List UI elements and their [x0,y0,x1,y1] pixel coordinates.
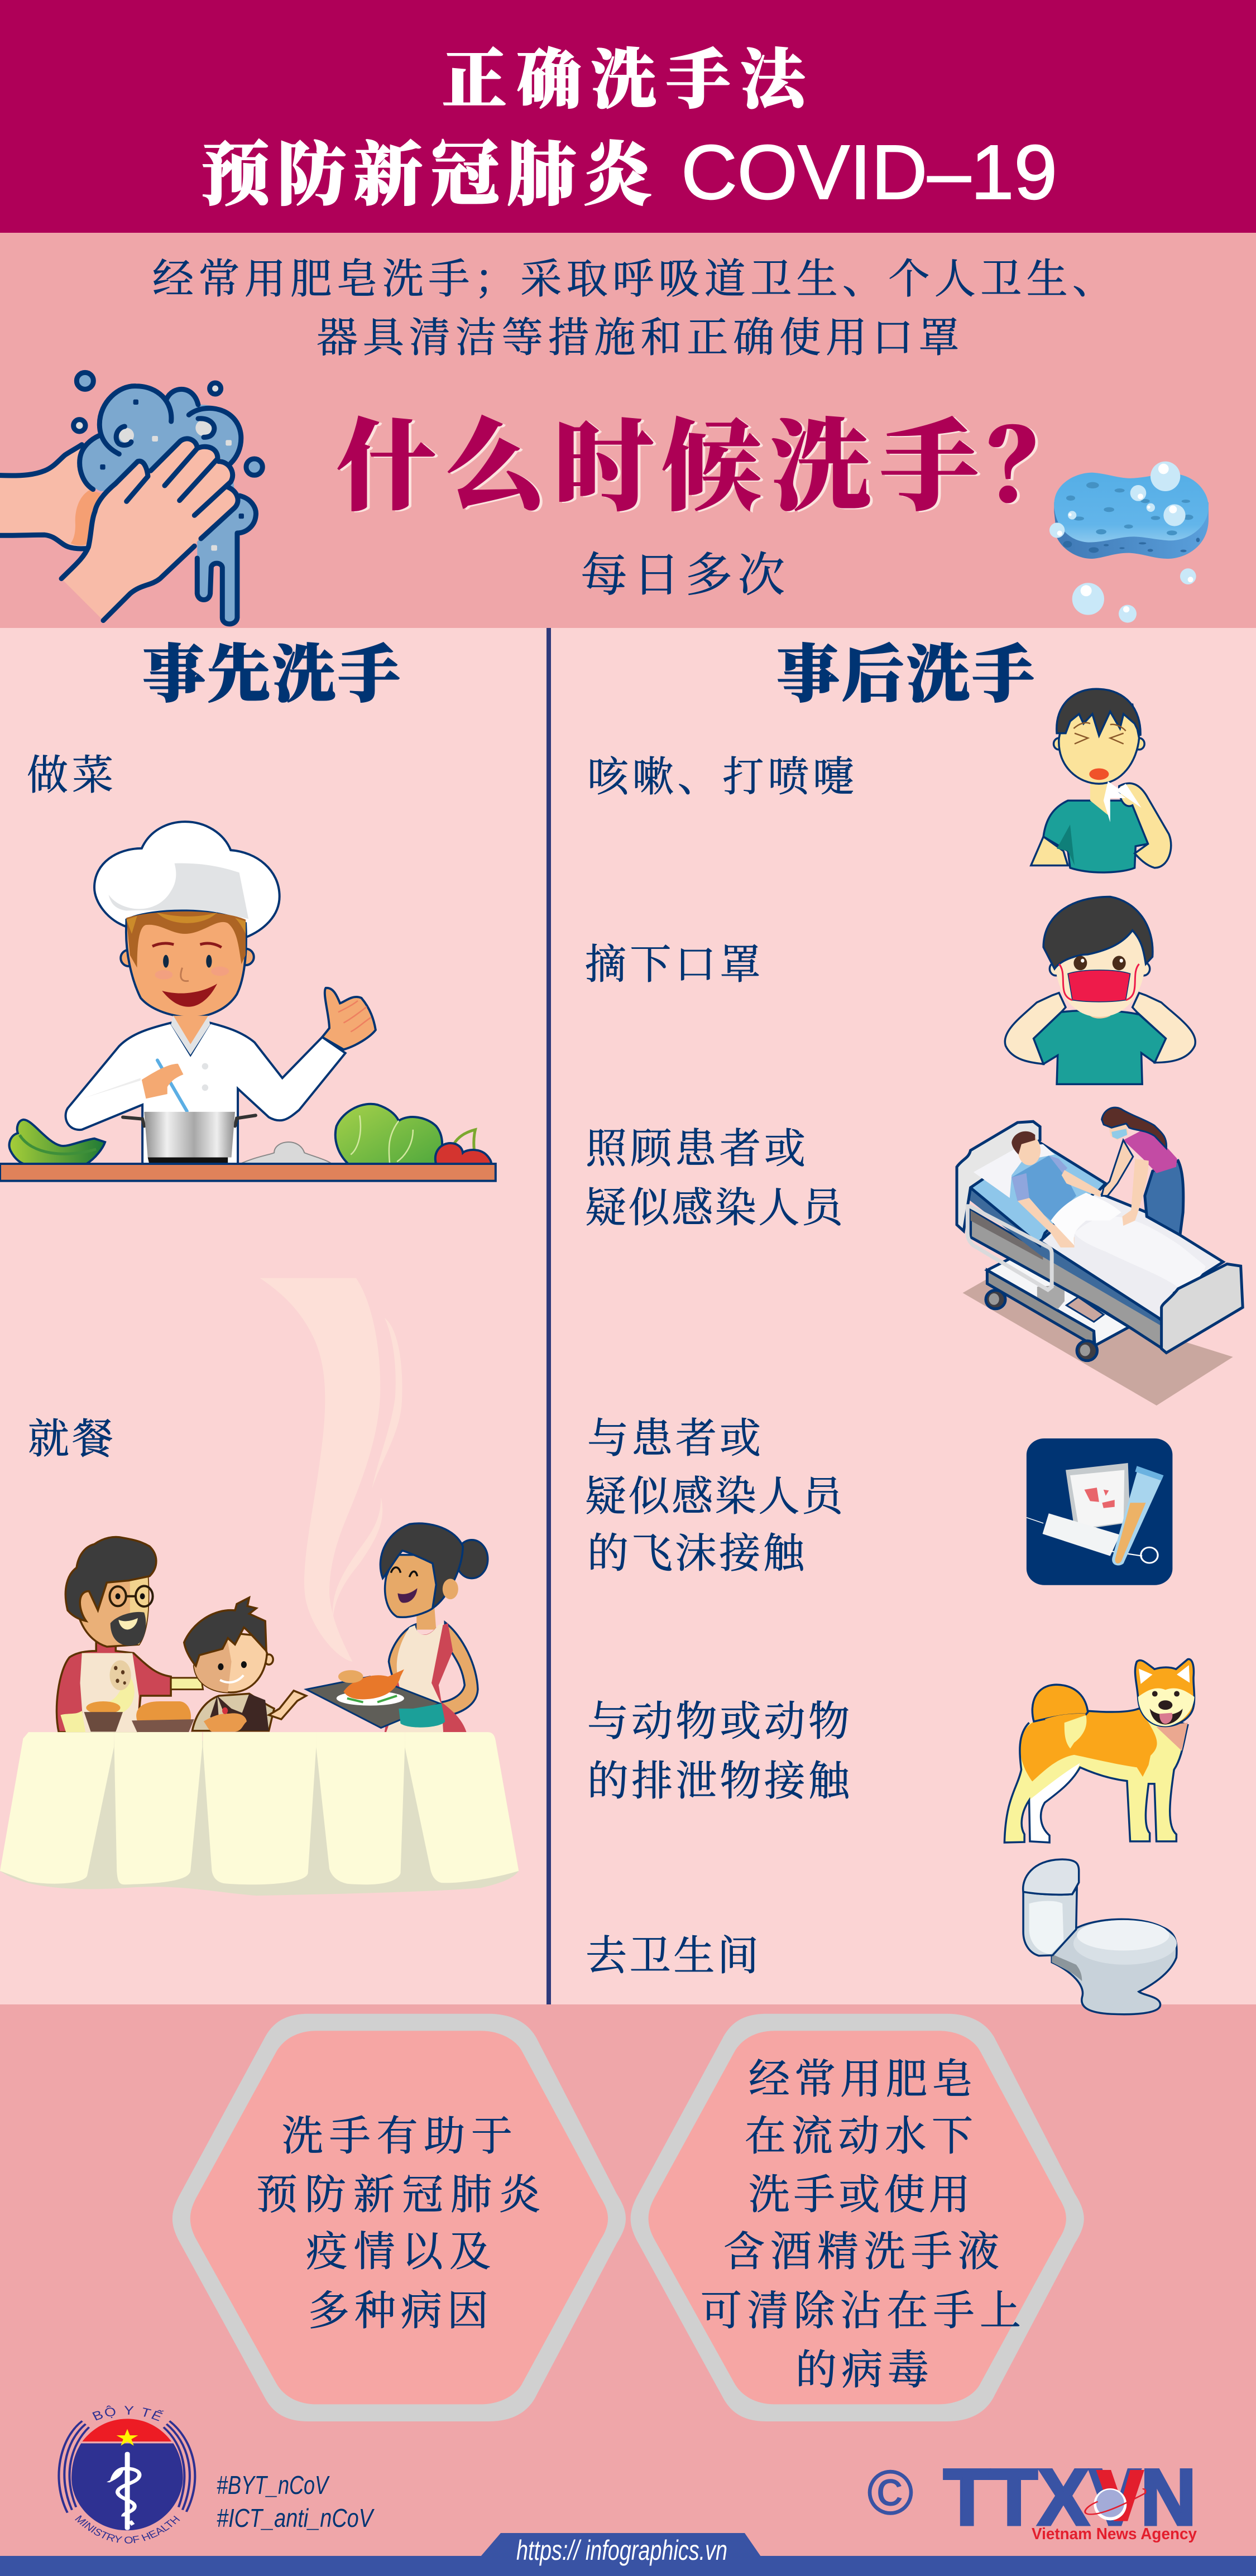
hexagon text: 预防新冠肺炎 [256,2172,541,2218]
hexagon text: 可清除沾在手上 [701,2289,1021,2334]
label: droplet contact [585,1416,846,1577]
panel: header banner [0,0,1256,233]
line 2: 疑似感染人员 [585,1186,846,1231]
illustration: shiba dog [1004,1659,1195,1843]
hexagon text [256,2114,541,2334]
tray with roast chicken [306,1670,445,1728]
hexagon text: 在流动水下 [745,2114,973,2160]
hexagon text: 的病毒 [795,2348,929,2393]
steam [260,1278,402,1662]
illustration: coughing boy [1031,689,1171,872]
hexagon text: 疫情以及 [306,2229,491,2275]
line 1: 与动物或动物 [587,1699,850,1745]
panel: intro band [0,233,1256,628]
copyright mark: © [867,2458,913,2527]
cabbages and cherries [335,1104,491,1165]
icon: sponge with bubbles [1049,462,1209,623]
icon: medical sample card [1027,1438,1172,1585]
chef hat [94,822,280,937]
url tab [481,2533,761,2566]
cooking pot [123,1112,333,1165]
illustration: boy removing mask [1005,896,1195,1084]
label: caring for patients [585,1126,846,1231]
label: dining: 就餐 [28,1417,113,1462]
logo: ttxvn copyright [867,2453,1197,2543]
hexagon shape [172,2014,626,2421]
icon: washing hands [0,372,262,624]
hexagon text: 洗手有助于 [282,2114,512,2160]
intro text line 2: 器具清洁等措施和正确使用口罩 [317,315,960,361]
hexagon text: 多种病因 [308,2289,488,2334]
counter top [0,1164,496,1181]
label: cooking: 做菜 [27,753,113,799]
question heading: 什么时候洗手？ [337,412,1087,523]
line 2: 的排泄物接触 [587,1759,851,1805]
line 1: 与患者或 [587,1416,761,1462]
ttxvn wordmark: TTXVN [943,2453,1196,2542]
agency name: Vietnam News Agency [1032,2525,1197,2543]
logo bottom text: MINISTRY OF HEALTH [75,2515,180,2544]
illustration: toilet [1023,1859,1177,2014]
mother [380,1523,488,1732]
chef head [121,910,254,1018]
label: animal contact [587,1699,851,1805]
heading: before: 事先洗手 [142,641,400,710]
illustration: patient in hospital bed [957,1107,1243,1405]
hexagon text: 含酒精洗手液 [723,2229,999,2275]
hexagon text: 经常用肥皂 [749,2057,973,2103]
footer bar [0,2556,1256,2576]
hashtags: #ICT_anti_nCoV [217,2503,375,2532]
panel: right hexagon [631,2014,1084,2421]
bread [132,1701,194,1732]
line 1: 照顾患者或 [586,1126,806,1172]
illustration: chef cooking [0,822,496,1181]
panel: main light section [0,628,1256,2004]
label: toilet: 去卫生间 [586,1934,759,1979]
hexagon text: 洗手或使用 [749,2172,970,2218]
logo: ministry of health [57,2406,196,2544]
every day text: 每日多次 [581,550,785,602]
table cloth [0,1732,519,1896]
hashtags [217,2471,375,2532]
hexagon shape [631,2014,1084,2421]
panel: left hexagon [172,2014,626,2421]
title line 2 covid: COVID–19 [681,129,1057,215]
cucumbers [9,1120,105,1164]
hashtags: #BYT_nCoV [217,2471,330,2500]
logo top text: BỘ Y TẾ [92,2406,164,2421]
heading: after: 事后洗手 [776,641,1034,710]
label: coughing: 咳嗽、打喷嚏 [587,755,854,800]
panel: bottom band [0,2004,1256,2576]
column divider [546,628,551,2004]
title line 2 chinese: 预防新冠肺炎 [200,137,659,214]
red v and globe [1085,2470,1145,2521]
label: removing mask: 摘下口罩 [585,942,761,988]
father [56,1537,203,1732]
line 3: 的飞沫接触 [587,1531,806,1577]
hexagon text [701,2057,1021,2393]
nurse [1102,1107,1183,1235]
title line 1: 正确洗手法 [442,45,812,117]
chef body [66,988,376,1165]
url text: https:// infographics.vn [516,2535,727,2566]
illustration: family at table [0,1278,519,1896]
intro text line 1: 经常用肥皂洗手；采取呼吸道卫生、个人卫生、 [152,257,1114,303]
son [184,1598,306,1731]
line 2: 疑似感染人员 [585,1474,846,1520]
